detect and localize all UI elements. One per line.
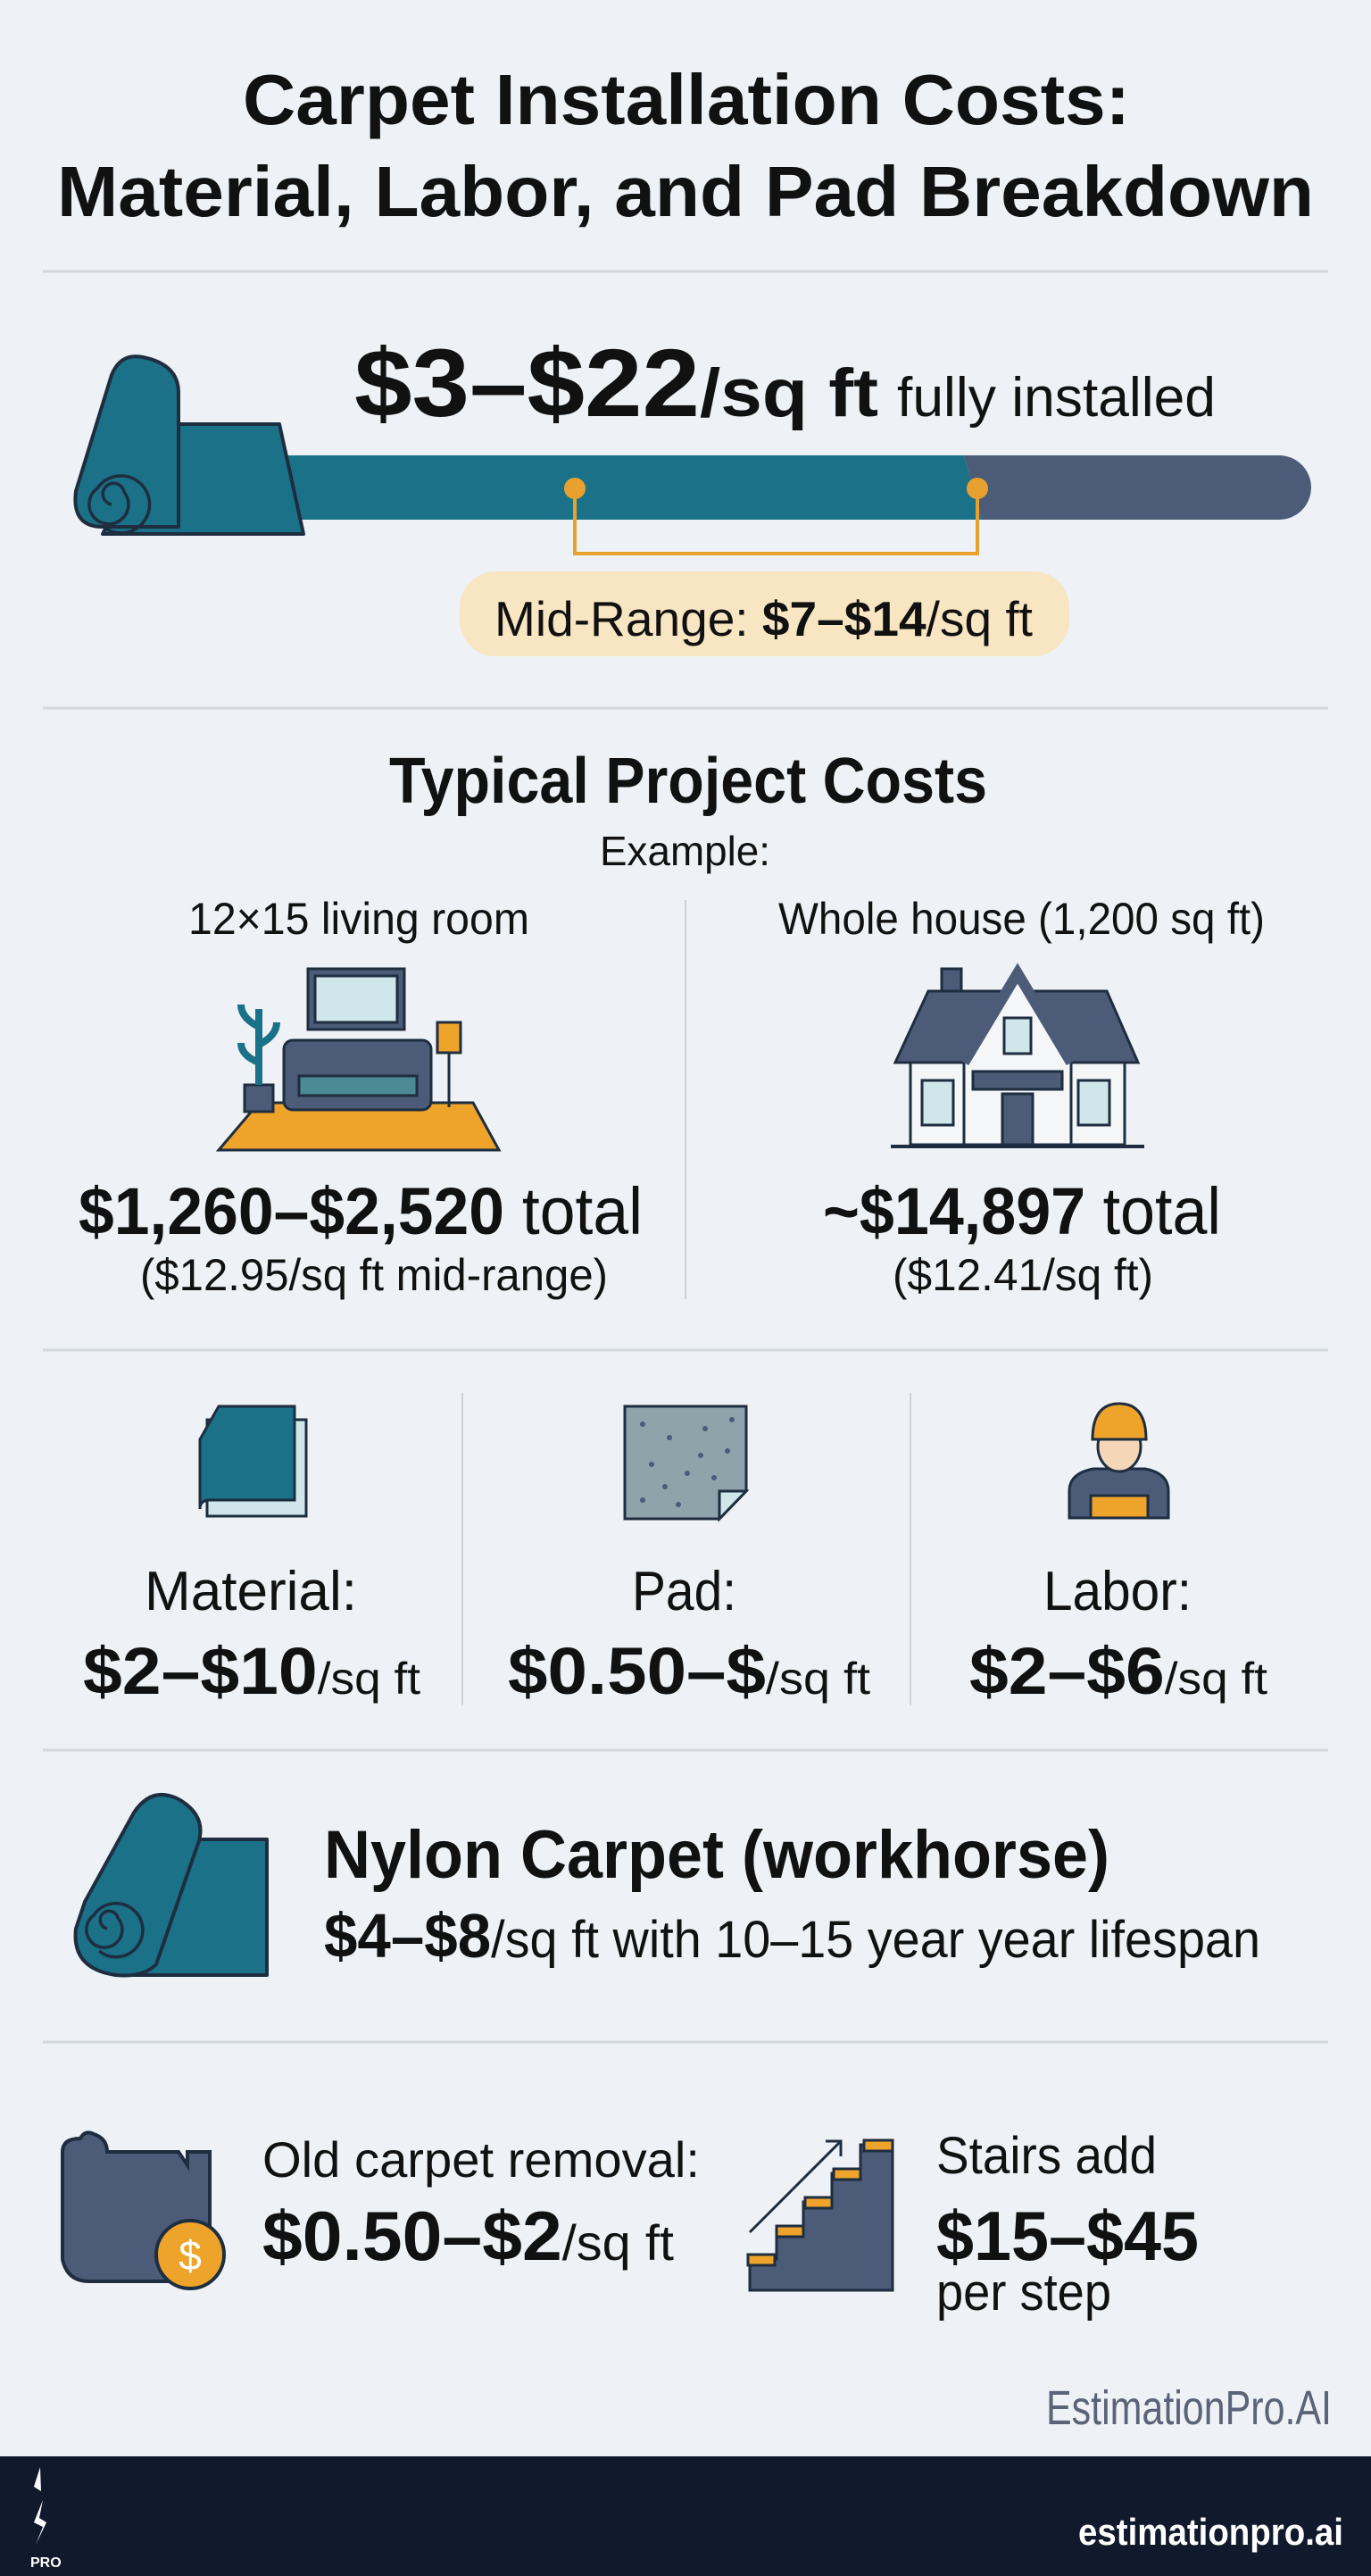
footer [0,2456,1371,2576]
panel: living room [79,894,643,1300]
icon: worker [1069,1404,1168,1518]
panel: material: Material: [145,1561,357,1622]
icon: removal [62,2132,224,2288]
icon: stairs [748,2140,893,2290]
panel: labor [969,1404,1267,1708]
panel: whole house: Whole house (1,200 sq ft) [778,894,1265,944]
callout: mid-range pill: Mid-Range: $7–$14/sq ft [494,591,1033,646]
panel: whole house: ~$14,897 total [823,1174,1221,1248]
panel: living room: ($12.95/sq ft mid-range) [140,1250,608,1300]
panel: living room: 12×15 living room [188,894,529,944]
panel: old carpet removal: Old carpet removal: [262,2131,700,2188]
panel: pad: Pad: [632,1561,736,1622]
logo: PRO [30,2555,62,2571]
panel: stairs: Stairs add [936,2127,1157,2185]
title: Material, Labor, and Pad Breakdown [57,152,1314,231]
panel: nylon carpet: $4–$8/sq ft with 10–15 year year lifespan [324,1901,1260,1971]
panel: stairs [748,2127,1199,2322]
title [57,60,1314,231]
panel: whole house: ($12.41/sq ft) [893,1250,1153,1300]
panel: nylon carpet: Nylon Carpet (workhorse) [324,1817,1109,1893]
panel: labor: Labor: [1043,1561,1192,1622]
headline price range: $3–$22 [354,329,700,437]
icon: removal: $ [179,2232,202,2279]
panel: old carpet removal [62,2131,700,2288]
heading: typical project costs: Typical Project Costs [389,746,987,817]
price range bar [268,455,1311,554]
callout: mid-range pill [460,571,1069,656]
panel: nylon carpet [76,1795,1260,1975]
panel: labor: $2–$6 /sq ft [969,1634,1267,1708]
icon: material sheet [200,1406,306,1516]
panel: material [83,1406,420,1708]
heading: typical project costs: Example: [600,828,770,874]
icon: house [891,969,1144,1146]
icon: pad [625,1406,746,1519]
panel: pad: $0.50–$ /sq ft [508,1634,870,1708]
icon: nylon roll [76,1795,267,1975]
icon: living room [219,969,499,1150]
panel: material: $2–$10 /sq ft [83,1634,420,1708]
panel: stairs: per step [936,2263,1111,2322]
panel: old carpet removal: $0.50–$2/sq ft [262,2197,674,2275]
panel: stairs: $15–$45 [936,2197,1199,2275]
headline price range: fully installed [897,367,1216,429]
panel: living room: $1,260–$2,520 total [79,1174,643,1248]
icon: carpet roll [75,356,303,534]
logo [30,2467,62,2571]
panel: whole house [778,894,1265,1300]
headline price range: /sq ft [700,355,878,431]
heading: typical project costs [389,746,987,874]
footer: estimationpro.ai [1078,2511,1343,2553]
title: Carpet Installation Costs: [243,60,1130,139]
panel: pad [508,1406,870,1708]
headline price range [354,329,1216,437]
